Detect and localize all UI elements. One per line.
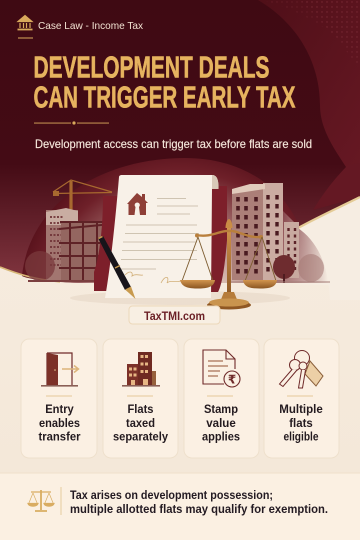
icon: fountain pen: [98, 236, 136, 299]
concrete frame: [59, 222, 112, 281]
card: entry enables transfer: enables: [39, 416, 80, 430]
illustration: legal deed scroll: [105, 175, 219, 298]
footer text: Tax arises on development possession;: [70, 488, 273, 502]
illustration: maroon ribbon behind deed: [94, 186, 227, 292]
subtitle: Development access can trigger tax before flats are sold: [35, 138, 312, 151]
title divider: [34, 121, 109, 125]
card: stamp value applies: Stamp: [204, 402, 238, 416]
card: entry enables transfer: Entry: [45, 402, 74, 416]
card: flats taxed separately: taxed: [126, 416, 155, 430]
trees right: [273, 255, 295, 279]
card: entry enables transfer: [21, 339, 97, 458]
trees left: [25, 251, 55, 281]
card: multiple flats eligible: flats: [289, 416, 313, 430]
icon: apartment buildings: [122, 352, 160, 387]
building small: [284, 222, 299, 278]
icon: document with rupee: ₹: [228, 372, 236, 386]
card: flats taxed separately: separately: [113, 430, 168, 444]
card: multiple flats eligible: [264, 339, 339, 458]
card: multiple flats eligible: Multiple: [279, 402, 323, 416]
title: [34, 50, 296, 114]
card: entry enables transfer: transfer: [38, 430, 81, 444]
illustration: right buildings: [230, 183, 330, 283]
deed lines: [121, 198, 199, 269]
icon: balance scale: [180, 219, 277, 310]
site badge: TaxTMI.com: TaxTMI.com: [144, 311, 205, 323]
card: multiple flats eligible: eligible: [284, 430, 319, 444]
footer band: [0, 472, 360, 540]
icon: house with keyhole: [127, 193, 148, 215]
icon: courthouse: [18, 16, 32, 30]
icon: gold scale: [28, 490, 54, 511]
signature: [125, 272, 183, 283]
header label: Case Law: [18, 16, 144, 38]
icon: keys with tag: [280, 350, 323, 388]
building main: [232, 183, 283, 280]
site badge: TaxTMI.com: [129, 306, 220, 324]
card: stamp value applies: value: [206, 416, 236, 430]
illustration: left building and crane: [25, 180, 112, 281]
card: stamp value applies: applies: [202, 430, 240, 444]
footer text: multiple allotted flats may qualify for exemption.: [70, 502, 328, 516]
card: flats taxed separately: [103, 339, 178, 458]
card: flats taxed separately: Flats: [128, 402, 154, 416]
card: stamp value applies: [184, 339, 259, 458]
header label: Case Law: Case Law - Income Tax: [38, 21, 144, 32]
tower back: [46, 208, 78, 281]
icon: door with arrow: [41, 353, 78, 387]
icon: crane: [53, 180, 112, 212]
